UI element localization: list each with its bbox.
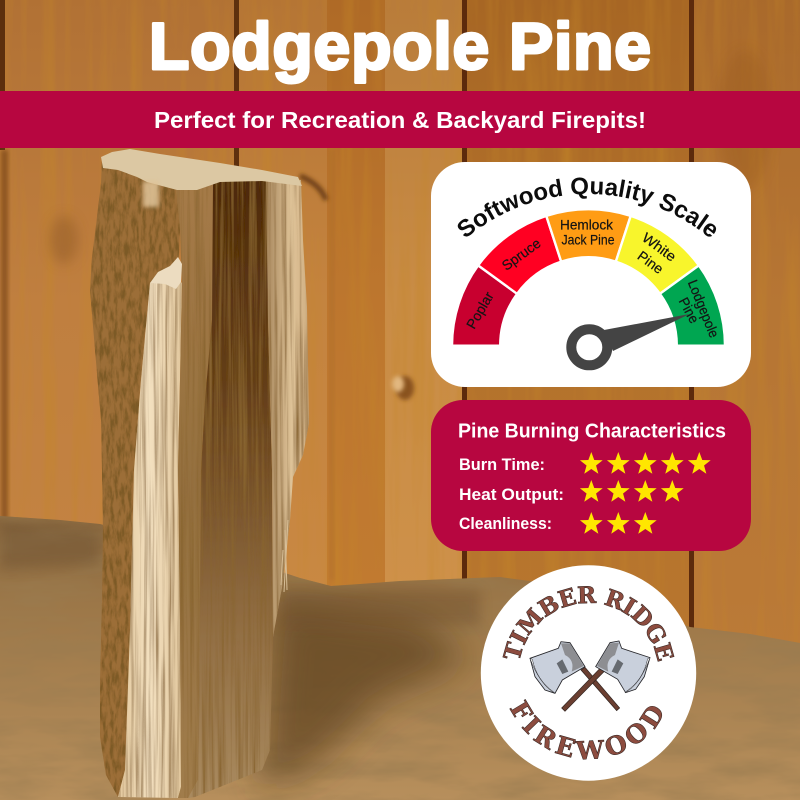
gauge labels: Pine [635,247,667,277]
log: light right edge [266,177,309,637]
row: burn time: Burn Time: [459,455,545,474]
log: frayed top end [101,149,302,190]
row: heat output [459,480,684,504]
gauge labels: White [639,229,680,265]
logo: timber ridge firewood [480,565,696,781]
icon: crossed axes [530,641,650,711]
gauge segment: white pine [616,216,699,294]
gauge labels: Jack Pine [562,232,615,248]
log: frayed chip patch [150,257,182,289]
row: burn time [459,452,711,474]
gauge chart [452,209,725,346]
gauge segment: lodgepole pine [660,265,725,346]
photo: split lodgepole pine log [90,149,309,798]
gauge segment: spruce [478,216,561,294]
row: cleanliness: Cleanliness: [459,514,552,533]
logo text: firewood: FIREWOOD [509,699,662,760]
background: tree stump surface [0,500,800,800]
panel: pine burning characteristics [431,400,751,551]
log: pale patch below top end [143,181,159,207]
gauge labels: Spruce [499,235,544,274]
title: Lodgepole Pine [149,9,651,83]
gauge segment: poplar [452,265,517,346]
gauge labels: Poplar [463,289,497,332]
row: heat output: Heat Output: [459,485,564,504]
log: bark face [90,160,180,797]
log: pale split face [118,272,182,798]
banner subtitle: Perfect for Recreation & Backyard Firepits! [154,107,646,133]
gauge labels [463,216,723,340]
row: cleanliness [459,512,657,534]
gauge labels: Pine [676,295,703,326]
burning heading: Pine Burning Characteristics [458,420,726,442]
banner [0,91,800,148]
gauge segment: hemlock and jack pine [546,209,631,262]
log: brown middle strip [176,182,215,798]
gauge labels: Lodgepole [685,277,723,340]
gauge needle [571,314,690,365]
logo text: timber ridge: TIMBER RIDGE [502,586,674,662]
log: shaded face [188,178,273,798]
panel: softwood quality scale [431,162,751,387]
gauge labels: Hemlock [560,216,614,232]
scale heading: Softwood Quality Scale [458,178,716,237]
